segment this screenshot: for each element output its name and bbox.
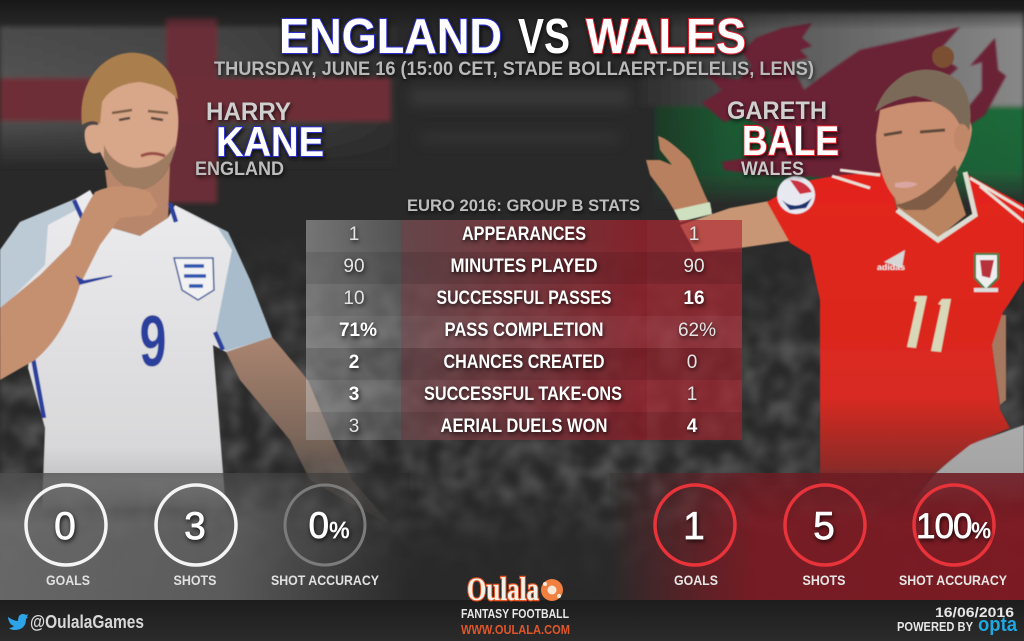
Bale stat circles: [655, 485, 1008, 588]
date and Opta credit: 16/06/2016: [935, 605, 1015, 620]
row values: [339, 224, 716, 437]
row values: MINUTES PLAYED: [450, 256, 598, 277]
row values: 3: [349, 384, 359, 405]
player name: Gareth Bale, Wales: [727, 97, 839, 180]
row values: 90: [683, 256, 705, 277]
twitter handle: @OulalaGames: [30, 612, 144, 632]
wordmark: Oulala: [467, 572, 539, 608]
shots stat: 3: [184, 505, 206, 548]
adidas logo: adidas: [877, 263, 906, 272]
red jersey: [767, 172, 1024, 500]
Wales crest: [974, 254, 998, 292]
Oulala logo: FANTASY FOOTBALL: [461, 607, 569, 621]
pointing arm and hand: [646, 136, 795, 252]
row values: 90: [343, 256, 365, 277]
goals stat: 1: [683, 505, 705, 548]
background: Wales flag with dragon: [640, 12, 1024, 206]
footer bar: [0, 600, 1024, 641]
forearm and hand: [0, 186, 158, 380]
nike swoosh: [77, 276, 112, 284]
row values: 62%: [678, 320, 716, 341]
background: stadium crowd: [0, 86, 1024, 540]
row values: 2: [349, 352, 359, 373]
player name: Gareth Bale, Wales: GARETH: [727, 97, 827, 125]
Oulala logo: [461, 572, 570, 637]
player name: Gareth Bale, Wales: BALE: [742, 117, 839, 164]
row values: AERIAL DUELS WON: [440, 416, 608, 437]
shot accuracy stat: SHOT ACCURACY: [271, 572, 380, 588]
icon: twitter bird: [8, 614, 28, 630]
shirt number 11: [907, 296, 951, 352]
table columns: [306, 220, 742, 440]
player name: Harry Kane, England: HARRY: [206, 98, 291, 126]
title: WALES: [586, 10, 746, 64]
subtitle: match details: THURSDAY, JUNE 16 (15:00 CET, STADE BOLLAERT-DELELIS, LENS): [214, 59, 814, 80]
background: England flag: [0, 18, 395, 203]
bottom stat band: Kane: [0, 473, 410, 600]
row values: 16: [683, 288, 705, 309]
bottom stat band: Bale: [610, 473, 1024, 600]
shoulder stripes: [832, 170, 1024, 222]
date and Opta credit: POWERED BY: [897, 620, 974, 634]
row values: PASS COMPLETION: [444, 320, 604, 341]
back arm: [988, 315, 1006, 405]
row values: APPEARANCES: [462, 224, 586, 245]
shots stat: SHOTS: [174, 572, 216, 588]
row values: CHANCES CREATED: [444, 352, 604, 373]
alternating rows: [306, 252, 742, 440]
title: [279, 10, 746, 64]
shots stat: SHOTS: [802, 572, 846, 588]
date and Opta credit: [897, 605, 1018, 636]
row values: 10: [343, 288, 365, 309]
sleeves: [0, 199, 80, 310]
neck and head: [875, 46, 972, 238]
goals stat: [26, 485, 106, 588]
shot accuracy stat: [271, 485, 380, 588]
shot accuracy stat: 100%: [916, 507, 990, 546]
player: Gareth Bale: [646, 46, 1024, 505]
white jersey: [0, 190, 272, 510]
shot accuracy stat: [899, 485, 1008, 588]
goals stat: 0: [54, 505, 76, 548]
shot accuracy stat: SHOT ACCURACY: [899, 572, 1008, 588]
right arm: [226, 337, 392, 526]
player name: Gareth Bale, Wales: WALES: [741, 159, 804, 180]
Oulala logo: WWW.OULALA.COM: [461, 623, 570, 637]
shorts: [910, 425, 1024, 505]
date and Opta credit: opta: [978, 614, 1018, 636]
shirt number 9: 9: [140, 302, 166, 382]
shots stat: 5: [813, 505, 835, 548]
row values: 71%: [339, 320, 377, 341]
stats table heading: EURO 2016: GROUP B STATS: [407, 196, 640, 215]
white collar: [897, 172, 975, 240]
Kane stat circles: [26, 485, 380, 588]
three lions crest: [174, 258, 214, 300]
row values: SUCCESSFUL TAKE-ONS: [424, 384, 622, 405]
head and neck: [81, 53, 178, 236]
dragon: [702, 23, 1006, 180]
goals stat: GOALS: [674, 572, 718, 588]
title: VS: [518, 10, 570, 64]
icon: football: [541, 579, 563, 601]
shots stat: [156, 485, 236, 588]
player: Harry Kane: [0, 53, 392, 526]
shot accuracy stat: 0%: [308, 505, 350, 546]
player name: Harry Kane, England: ENGLAND: [195, 159, 284, 180]
row values: SUCCESSFUL PASSES: [436, 288, 612, 309]
row values: 1: [349, 224, 359, 245]
row values: 0: [687, 352, 697, 373]
player name: Harry Kane, England: [195, 98, 324, 180]
stats table: [306, 220, 742, 440]
row values: 4: [687, 416, 698, 437]
shots stat: [785, 485, 865, 588]
Euro 2016 sleeve badge: [777, 176, 815, 214]
goals stat: GOALS: [46, 572, 90, 588]
player name: Harry Kane, England: KANE: [216, 118, 324, 165]
row values: 1: [689, 224, 699, 245]
adidas logo: [877, 250, 906, 272]
goals stat: [655, 485, 735, 588]
title: ENGLAND: [279, 10, 502, 64]
blue collar and side trim: [33, 200, 223, 418]
row values: 1: [687, 384, 697, 405]
row values: 3: [349, 416, 359, 437]
